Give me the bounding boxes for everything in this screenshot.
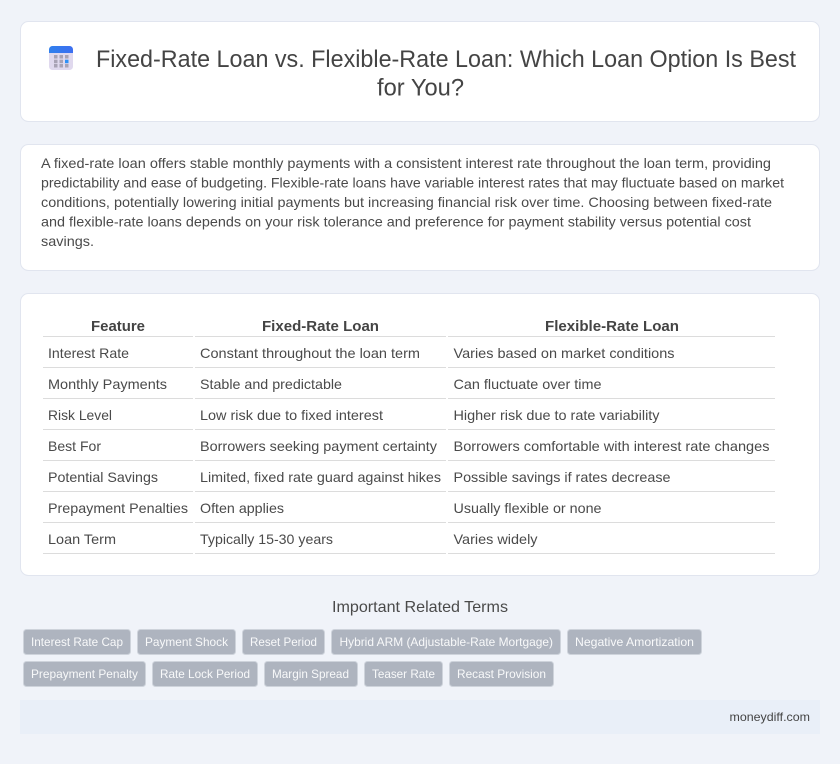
table header: Fixed-Rate Loan [262, 319, 379, 335]
chip [364, 662, 442, 686]
text block: summary: conditions, potentially lowering initial payments but increasing financial risk over time. Choosing between fixed-rate [41, 194, 772, 210]
row: monthly payments: Stable and predictable [200, 376, 342, 392]
chip: Recast Provision [457, 667, 546, 681]
chip [138, 630, 236, 654]
row: interest rate [48, 345, 674, 361]
row: best for: Borrowers comfortable with interest rate changes [454, 438, 770, 454]
row: prepayment penalties: Often applies [200, 500, 284, 516]
title [96, 46, 796, 102]
row: monthly payments: Can fluctuate over time [454, 376, 602, 392]
chip [450, 662, 554, 686]
chip: Hybrid ARM (Adjustable-Rate Mortgage) [340, 635, 553, 649]
text block: summary: predictability and ease of budgeting. Flexible-rate loans have variable interest rates that may fluctuate based on market [41, 174, 784, 190]
row: best for: Borrowers seeking payment certainty [200, 438, 437, 454]
chip [264, 662, 358, 686]
row: prepayment penalties [48, 500, 602, 516]
row: risk level [48, 407, 660, 423]
row: loan term: Loan Term [48, 531, 116, 547]
chip: Prepayment Penalty [31, 667, 138, 681]
row: prepayment penalties: Usually flexible or none [454, 500, 602, 516]
chip [24, 630, 130, 654]
row: loan term: Varies widely [454, 531, 538, 547]
text block: summary: and flexible-rate loans depends on your risk tolerance and preference for payment stability versus potential cost [41, 214, 751, 230]
row: loan term: Typically 15-30 years [200, 531, 333, 547]
panel: intro paragraph [20, 144, 820, 270]
chip [568, 630, 702, 654]
chip: Interest Rate Cap [31, 635, 123, 649]
chip [24, 662, 146, 686]
chip: Teaser Rate [372, 667, 435, 681]
table header: Feature [91, 319, 145, 335]
row: monthly payments [48, 376, 602, 392]
related term chips [24, 630, 702, 686]
row: interest rate: Constant throughout the loan term [200, 345, 420, 361]
row: potential savings [48, 469, 671, 485]
panel: title card [20, 22, 820, 122]
row: risk level: Risk Level [48, 407, 112, 423]
row: prepayment penalties: Prepayment Penalties [48, 500, 188, 516]
row: loan term [48, 531, 538, 547]
text block: summary [41, 155, 784, 249]
row: potential savings: Potential Savings [48, 469, 158, 485]
panel: comparison table [20, 294, 820, 576]
chip: Rate Lock Period [160, 667, 250, 681]
icon: calendar [49, 46, 73, 70]
chip: Margin Spread [272, 667, 349, 681]
row: risk level: Low risk due to fixed interest [200, 407, 383, 423]
chip [242, 630, 324, 654]
chip: Negative Amortization [575, 635, 694, 649]
title: Fixed-Rate Loan vs. Flexible-Rate Loan: Which Loan Option Is Best [96, 46, 796, 73]
row: interest rate: Interest Rate [48, 345, 129, 361]
row: interest rate: Varies based on market conditions [454, 345, 674, 361]
row: monthly payments: Monthly Payments [48, 376, 167, 392]
table header [91, 319, 679, 335]
title: for You? [377, 74, 464, 102]
chip: Payment Shock [145, 635, 229, 649]
text block: summary: A fixed-rate loan offers stable monthly payments with a consistent interest rate throughout the loan term, providing [41, 155, 771, 171]
footer: source: moneydiff.com [730, 710, 810, 724]
text block: summary: savings. [41, 233, 94, 249]
footer bar [20, 700, 820, 734]
heading: related terms: Important Related Terms [332, 599, 508, 616]
chip [332, 630, 560, 654]
chip [152, 662, 258, 686]
table header: Flexible-Rate Loan [545, 319, 679, 335]
row: potential savings: Possible savings if rates decrease [454, 469, 671, 485]
chip: Reset Period [250, 635, 317, 649]
row: risk level: Higher risk due to rate variability [454, 407, 660, 423]
row: potential savings: Limited, fixed rate guard against hikes [200, 469, 441, 485]
row: best for [48, 438, 770, 454]
row: best for: Best For [48, 438, 101, 454]
